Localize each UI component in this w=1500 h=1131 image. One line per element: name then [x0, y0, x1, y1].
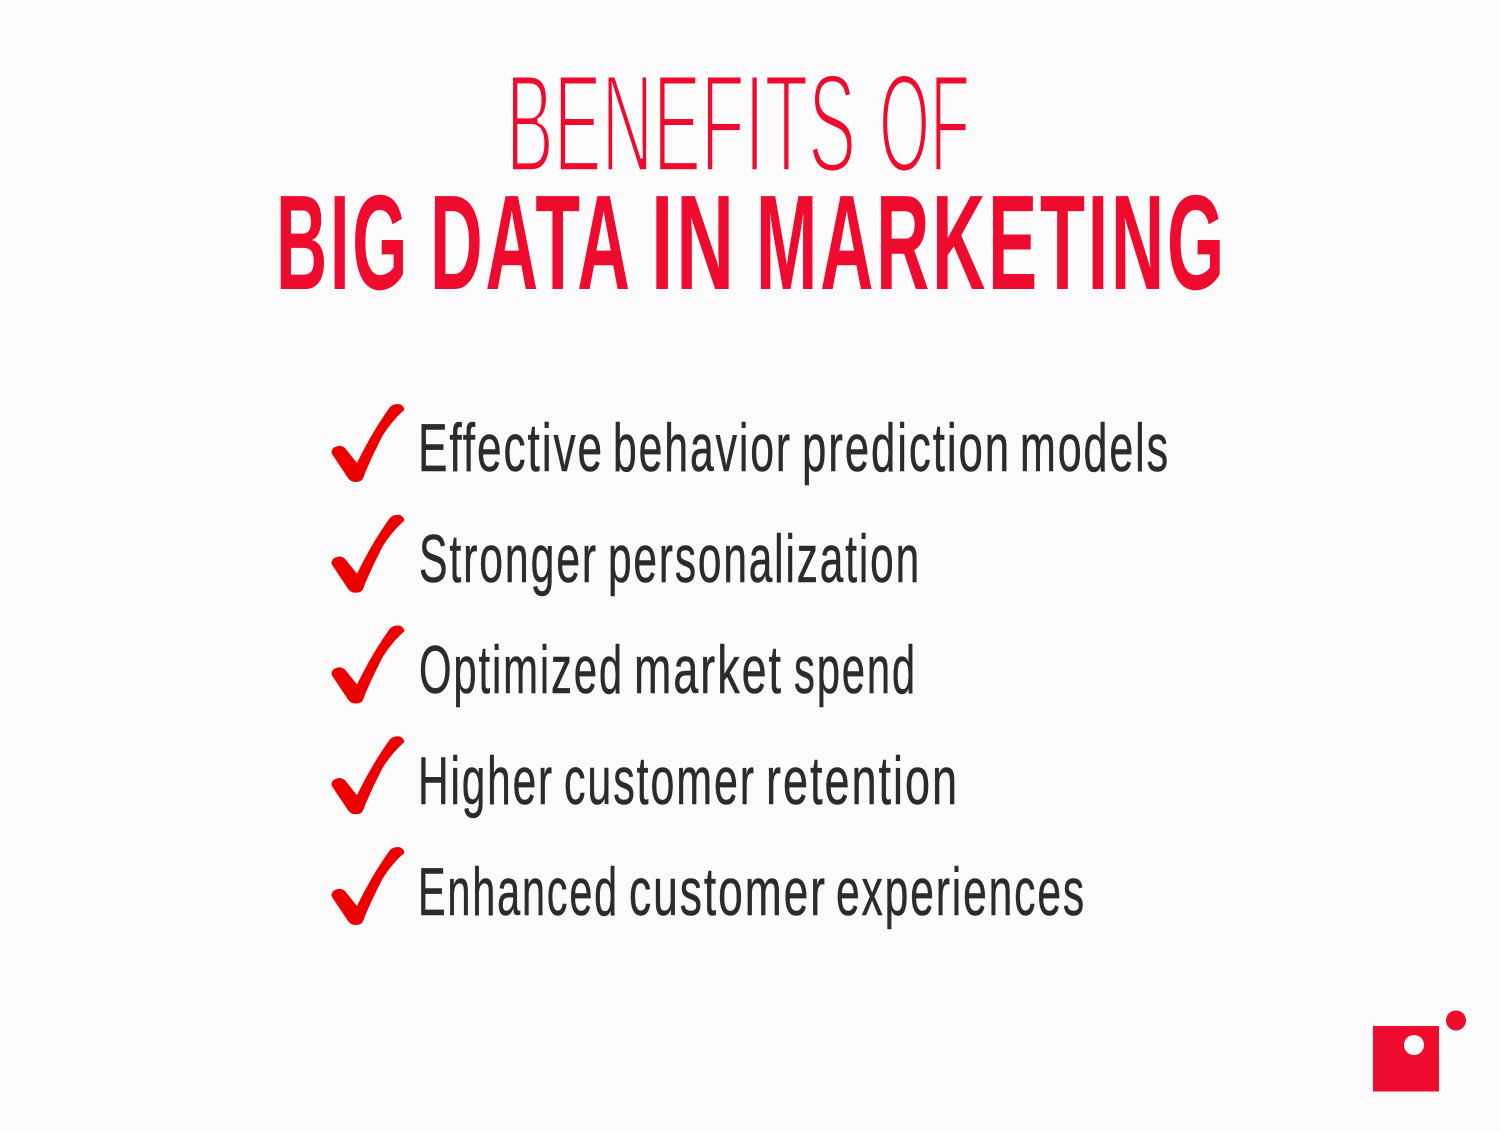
title: big data in marketing: IN — [651, 167, 737, 318]
title: big data in marketing: DATA — [430, 167, 630, 318]
icon: check mark — [332, 404, 404, 482]
title: benefits of: BENEFITS — [506, 44, 856, 202]
text: enhanced customer experiences: Enhanced — [418, 854, 619, 930]
text: higher customer retention: retention — [766, 743, 959, 819]
icon: check mark — [332, 847, 404, 925]
benefit 1 — [332, 404, 1170, 486]
text: effective behavior prediction models: models — [1020, 410, 1170, 486]
text: stronger personalization: personalization — [608, 521, 921, 597]
text: higher customer retention: Higher — [418, 743, 554, 819]
benefit 3 — [332, 626, 917, 708]
icon: check mark — [332, 626, 404, 704]
text: effective behavior prediction models: prediction — [802, 410, 1011, 486]
text: effective behavior prediction models: Effective — [418, 410, 604, 486]
text: optimized market spend: market — [634, 632, 783, 708]
logo — [1373, 1010, 1466, 1092]
text: enhanced customer experiences: customer — [629, 854, 827, 930]
text: effective behavior prediction models: behavior — [613, 410, 792, 486]
text: OF — [879, 44, 970, 202]
text: stronger personalization: Stronger — [419, 521, 598, 597]
benefit 4 — [332, 736, 959, 819]
benefit 2 — [332, 515, 921, 597]
icon: check mark — [332, 515, 404, 593]
benefit 5 — [332, 847, 1086, 930]
benefit list — [332, 404, 1170, 930]
text: higher customer retention: customer — [564, 743, 756, 819]
icon: check mark — [332, 736, 404, 814]
title: big data in marketing: BIG — [276, 167, 410, 318]
text: optimized market spend: Optimized — [419, 632, 624, 708]
text: optimized market spend: spend — [794, 632, 917, 708]
text: enhanced customer experiences: experiences — [836, 854, 1086, 930]
